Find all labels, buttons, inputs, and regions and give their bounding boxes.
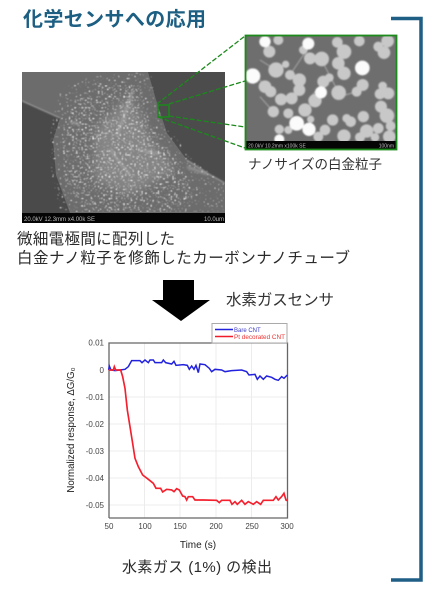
- description text: 白金ナノ粒子を修飾したカーボンナノチューブ: [17, 248, 350, 267]
- line chart: [66, 324, 294, 551]
- chart caption: 水素ガス (1%) の検出: [122, 559, 272, 576]
- y axis tick labels: -0.04: [86, 474, 105, 483]
- x axis title: Time (s): [180, 540, 216, 551]
- y axis tick labels: [86, 338, 105, 510]
- title: 化学センサへの応用: [23, 8, 206, 31]
- x axis tick labels: 150: [173, 522, 187, 531]
- x axis tick labels: 100: [138, 522, 152, 531]
- grid lines: [109, 343, 287, 518]
- dense particles: [62, 85, 195, 212]
- inset micrograph: platinum nanoparticles: 100nm: [379, 144, 394, 150]
- y axis tick labels: -0.05: [86, 501, 105, 510]
- y axis tick labels: 0.01: [88, 338, 105, 348]
- x axis tick labels: 300: [280, 522, 294, 531]
- inset micrograph: platinum nanoparticles: 20.0kV 10.2mm x100k SE: [248, 144, 306, 150]
- inset micrograph: platinum nanoparticles: [245, 35, 396, 150]
- y axis tick labels: -0.02: [86, 420, 105, 429]
- axes frame: [109, 343, 288, 518]
- inset caption: ナノサイズの白金粒子: [248, 157, 382, 172]
- x axis tick labels: 50: [105, 522, 114, 531]
- bright electrode edges: [22, 101, 225, 183]
- micrograph: nanotubes between electrodes: 20.0kV 12.3mm x4.00k SE: [24, 217, 95, 223]
- y axis tick labels: -0.01: [86, 393, 105, 402]
- description text: [17, 230, 350, 267]
- dark electrode gap, upper right: [148, 72, 225, 183]
- arrow: [152, 280, 210, 321]
- x axis tick labels: 200: [209, 522, 223, 531]
- legend: Bare CNT: [234, 328, 261, 334]
- micrograph: nanotubes between electrodes: [22, 72, 225, 223]
- y axis tick labels: 0: [100, 366, 105, 375]
- zoom connector lines: [157, 36, 245, 148]
- bracket: [391, 18, 421, 580]
- y axis title: Normalized response, ΔG/G₀: [66, 367, 77, 493]
- nanotube bundle glow: [95, 95, 175, 195]
- legend: Pt decorated CNT: [234, 335, 285, 341]
- x axis tick labels: 250: [245, 522, 259, 531]
- x axis tick labels: [105, 522, 294, 531]
- micrograph: nanotubes between electrodes: 10.0um: [204, 217, 224, 223]
- description text: 微細電極間に配列した: [17, 230, 175, 248]
- series: bare CNT: [109, 360, 287, 380]
- dark electrode gap, lower left: [22, 101, 70, 213]
- series: Pt decorated CNT: [109, 367, 287, 504]
- legend: [212, 324, 287, 343]
- sparse scattered particles: [50, 72, 224, 212]
- bright nanotube streaks: [70, 90, 207, 175]
- y axis tick labels: -0.03: [86, 447, 105, 456]
- sensor label: 水素ガスセンサ: [226, 291, 334, 309]
